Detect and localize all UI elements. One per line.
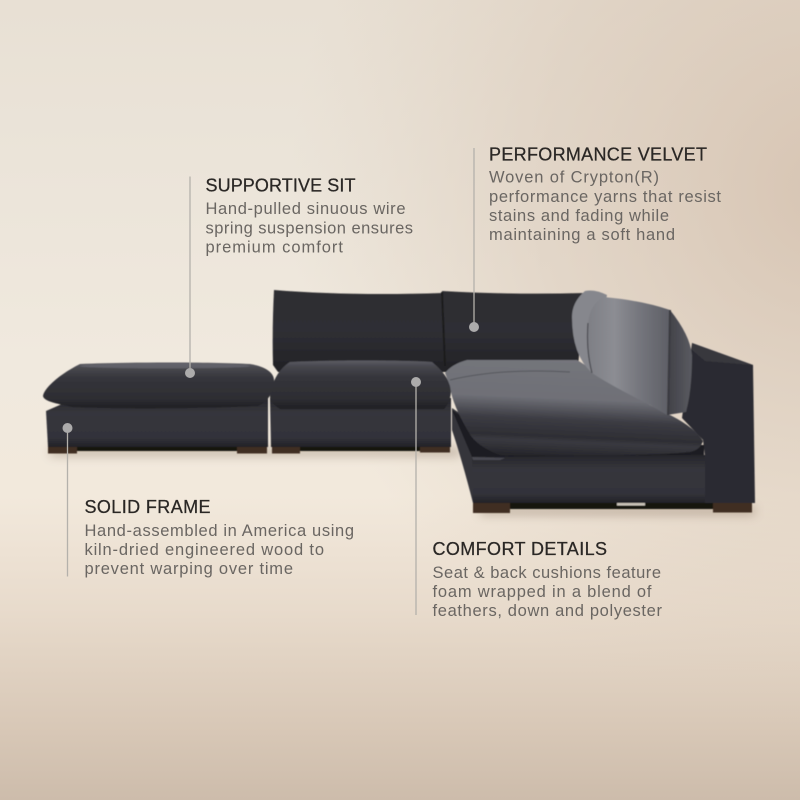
under-frame shadow [77, 446, 713, 509]
ottoman cushion [43, 362, 274, 408]
callout: performance velvet: PERFORMANCE VELVET [489, 144, 707, 164]
chaise base side [452, 408, 500, 503]
callout: comfort details: feathers, down and polyester [432, 602, 662, 620]
callout: solid frame: kiln-dried engineered wood to [84, 541, 324, 559]
callout: performance velvet: Woven of Crypton(R) [489, 168, 659, 186]
callout: comfort details: foam wrapped in a blend of [432, 583, 652, 601]
chaise cushion [445, 360, 703, 456]
callout: supportive sit: spring suspension ensures [206, 220, 413, 238]
middle base [270, 398, 451, 447]
callout: performance velvet: performance yarns that resist [489, 188, 721, 206]
callout: performance velvet: stains and fading while [489, 207, 669, 225]
floor shadow [50, 448, 755, 515]
callout: comfort details: COMFORT DETAILS [432, 539, 607, 559]
back bolster rear [572, 290, 607, 373]
callout: comfort details [411, 377, 662, 620]
callout: solid frame: SOLID FRAME [84, 497, 210, 517]
callout: supportive sit: Hand-pulled sinuous wire [206, 200, 406, 218]
callout: supportive sit: premium comfort [206, 238, 343, 256]
callout: solid frame: Hand-assembled in America using [84, 522, 354, 540]
back cushion: centre [273, 290, 450, 372]
arm [682, 343, 755, 503]
velvet highlight [80, 364, 250, 368]
callout: supportive sit [185, 176, 413, 378]
chaise base top [452, 410, 704, 457]
sofa [43, 290, 755, 513]
callout: performance velvet [469, 144, 721, 332]
wooden feet [48, 445, 752, 513]
callout: solid frame [62, 423, 354, 578]
middle cushion [270, 360, 451, 409]
chaise base front [472, 455, 705, 503]
back bolster front [588, 297, 670, 415]
ottoman base [46, 398, 268, 447]
callout: performance velvet: maintaining a soft hand [489, 226, 675, 244]
callout: comfort details: Seat & back cushions feature [432, 564, 661, 582]
callout: solid frame: prevent warping over time [84, 560, 293, 578]
callout: supportive sit: SUPPORTIVE SIT [206, 176, 356, 196]
back cushion: corner [442, 291, 585, 372]
